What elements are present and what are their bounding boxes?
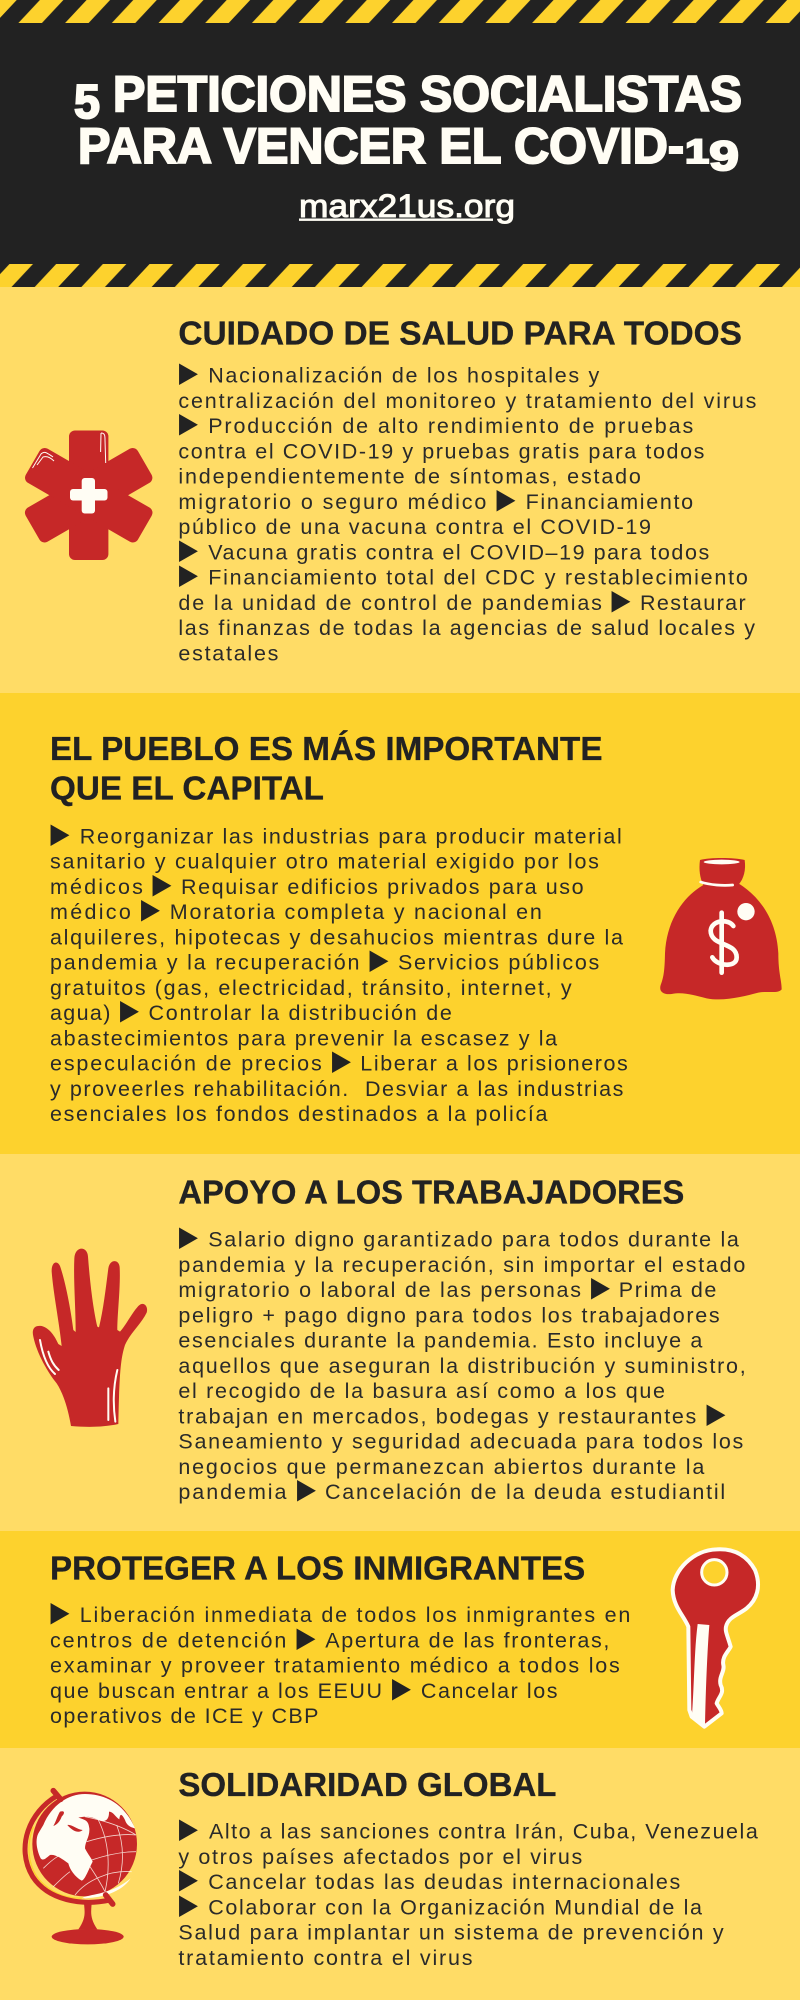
title xyxy=(74,66,742,179)
panel: el pueblo xyxy=(0,693,800,1154)
text block: examinar y proveer tratamiento médico a todos los xyxy=(50,1654,620,1678)
text block xyxy=(50,1595,630,1728)
text block: ▶ xyxy=(120,993,139,1026)
icon: star of life xyxy=(23,430,155,560)
text block: ▶ xyxy=(179,1220,198,1253)
text block: Cancelar todas las deudas internacionales xyxy=(208,1870,680,1894)
text block: Salud para implantar un sistema de prevención y xyxy=(178,1921,724,1945)
title: 5 xyxy=(74,76,100,129)
text block: ▶ xyxy=(141,892,160,925)
text block xyxy=(50,816,628,1126)
text block: y proveerles rehabilitación. Desviar a las industrias xyxy=(50,1077,623,1101)
text block: Reorganizar las industrias para producir material xyxy=(80,824,622,848)
text block: Apertura de las fronteras, xyxy=(325,1628,609,1652)
heading: EL PUEBLO ES MÁS IMPORTANTE xyxy=(50,730,602,767)
text block: especulación de precios xyxy=(50,1052,322,1076)
text block: Requisar edificios privados para uso xyxy=(181,875,584,899)
text block xyxy=(178,1812,758,1970)
heading: QUE EL CAPITAL xyxy=(50,769,324,806)
text block: alquileres, hipotecas y desahucios mientras dure la xyxy=(50,925,623,949)
text block: tratamiento contra el virus xyxy=(178,1946,472,1970)
text block: ▶ xyxy=(591,1270,610,1303)
text block: Salario digno garantizado para todos durante la xyxy=(208,1228,739,1252)
text block: agua) xyxy=(50,1001,110,1025)
text block: ▶ xyxy=(179,1862,198,1895)
text block: Liberación inmediata de todos los inmigrantes en xyxy=(80,1603,630,1627)
text block: Prima de xyxy=(619,1278,716,1302)
text block: Nacionalización de los hospitales y xyxy=(208,364,599,388)
text block: independientemente de síntomas, estado xyxy=(178,465,641,489)
text block: pandemia y la recuperación xyxy=(50,951,360,975)
text block: Servicios públicos xyxy=(398,951,599,975)
text block: ▶ xyxy=(179,406,198,439)
heading xyxy=(50,730,602,806)
icon: key xyxy=(673,1549,758,1727)
text block: médicos xyxy=(50,875,143,899)
text block: ▶ xyxy=(152,867,172,900)
panel: proteger a los inmigrantes xyxy=(0,1531,800,1748)
text block: ▶ xyxy=(370,943,389,976)
text block: esenciales durante la pandemia. Esto incluye a xyxy=(178,1329,702,1353)
text block: Liberar a los prisioneros xyxy=(360,1052,628,1076)
text block: Moratoria completa y nacional en xyxy=(170,900,542,924)
text block xyxy=(178,1220,746,1505)
text block: las finanzas de todas la agencias de salud locales y xyxy=(178,616,755,640)
text block: Alto a las sanciones contra Irán, Cuba, Venezuela xyxy=(209,1820,758,1844)
text block: esenciales los fondos destinados a la policía xyxy=(50,1102,548,1126)
text block: ▶ xyxy=(179,1887,198,1920)
text block: trabajan en mercados, bodegas y restaurantes xyxy=(178,1404,696,1428)
text block: Colaborar con la Organización Mundial de la xyxy=(208,1895,702,1919)
panel: cuidado de salud xyxy=(0,287,800,693)
title: 1 xyxy=(685,133,704,171)
icon: globe xyxy=(25,1791,137,1944)
text block: ▶ xyxy=(392,1671,411,1704)
text block: ▶ xyxy=(296,1620,316,1653)
title: PETICIONES SOCIALISTAS xyxy=(113,66,742,122)
hazard stripes bottom xyxy=(0,264,800,287)
text block: que buscan entrar a los EEUU xyxy=(50,1679,382,1703)
text block: gratuitos (gas, electricidad, tránsito, internet, y xyxy=(50,976,572,1000)
text block: público de una vacuna contra el COVID-19 xyxy=(178,515,651,539)
text block: sanitario y cualquier otro material exigido por los xyxy=(50,850,599,874)
text block: Cancelar los xyxy=(421,1679,558,1703)
text block: Vacuna gratis contra el COVID–19 para todos xyxy=(208,540,709,564)
text block: Producción de alto rendimiento de pruebas xyxy=(208,414,693,438)
text block: aquellos que aseguran la distribución y suministro, xyxy=(178,1354,746,1378)
text block: migratorio o seguro médico xyxy=(178,490,486,514)
heading: SOLIDARIDAD GLOBAL xyxy=(178,1766,556,1803)
text block: ▶ xyxy=(179,558,198,591)
text block: ▶ xyxy=(612,583,631,616)
text block: Restaurar xyxy=(640,591,746,615)
text block: ▶ xyxy=(297,1472,316,1505)
text block: abastecimientos para prevenir la escasez y la xyxy=(50,1026,557,1050)
heading: CUIDADO DE SALUD PARA TODOS xyxy=(178,314,742,351)
text block: ▶ xyxy=(50,1595,70,1628)
heading: APOYO A LOS TRABAJADORES xyxy=(178,1173,684,1210)
text block: de la unidad de control de pandemias xyxy=(178,591,602,615)
text block: ▶ xyxy=(332,1044,351,1077)
text block: Financiamiento total del CDC y restablecimiento xyxy=(208,566,748,590)
text block: pandemia y la recuperación, sin importar el estado xyxy=(178,1253,745,1277)
icon: hand xyxy=(33,1249,147,1427)
title: PARA VENCER EL COVID- xyxy=(78,118,684,174)
panel: apoyo a los trabajadores xyxy=(0,1154,800,1531)
text block: estatales xyxy=(178,641,278,665)
text block: Cancelación de la deuda estudiantil xyxy=(325,1480,725,1504)
text block: contra el COVID-19 y pruebas gratis para todos xyxy=(178,439,704,463)
panel: solidaridad global xyxy=(0,1748,800,2000)
text block: Controlar la distribución de xyxy=(148,1001,452,1025)
hazard stripes top xyxy=(0,0,800,23)
title: 9 xyxy=(709,132,739,179)
text block: migratorio o laboral de las personas xyxy=(178,1278,581,1302)
text block: ▶ xyxy=(179,1812,198,1845)
text block: ▶ xyxy=(50,816,70,849)
text block: ▶ xyxy=(179,532,198,565)
text block: peligro + pago digno para todos los trabajadores xyxy=(178,1303,720,1327)
text block: y otros países afectados por el virus xyxy=(178,1845,582,1869)
text block: ▶ xyxy=(496,482,516,515)
text block: el recogido de la basura así como a los que xyxy=(178,1379,665,1403)
icon: money bag xyxy=(660,858,782,999)
heading: PROTEGER A LOS INMIGRANTES xyxy=(50,1549,585,1586)
text block: pandemia xyxy=(178,1480,287,1504)
text block: ▶ xyxy=(706,1396,726,1429)
text block: Saneamiento y seguridad adecuada para todos los xyxy=(178,1430,743,1454)
website link: marx21us.org xyxy=(299,188,515,224)
text block xyxy=(178,356,756,665)
text block: Financiamiento xyxy=(526,490,693,514)
text block: negocios que permanezcan abiertos durante la xyxy=(178,1455,704,1479)
text block: ▶ xyxy=(179,356,198,389)
panel: header xyxy=(0,0,800,287)
text block: operativos de ICE y CBP xyxy=(50,1704,318,1728)
text block: centros de detención xyxy=(50,1628,286,1652)
text block: centralización del monitoreo y tratamiento del virus xyxy=(178,389,756,413)
text block: médico xyxy=(50,900,131,924)
